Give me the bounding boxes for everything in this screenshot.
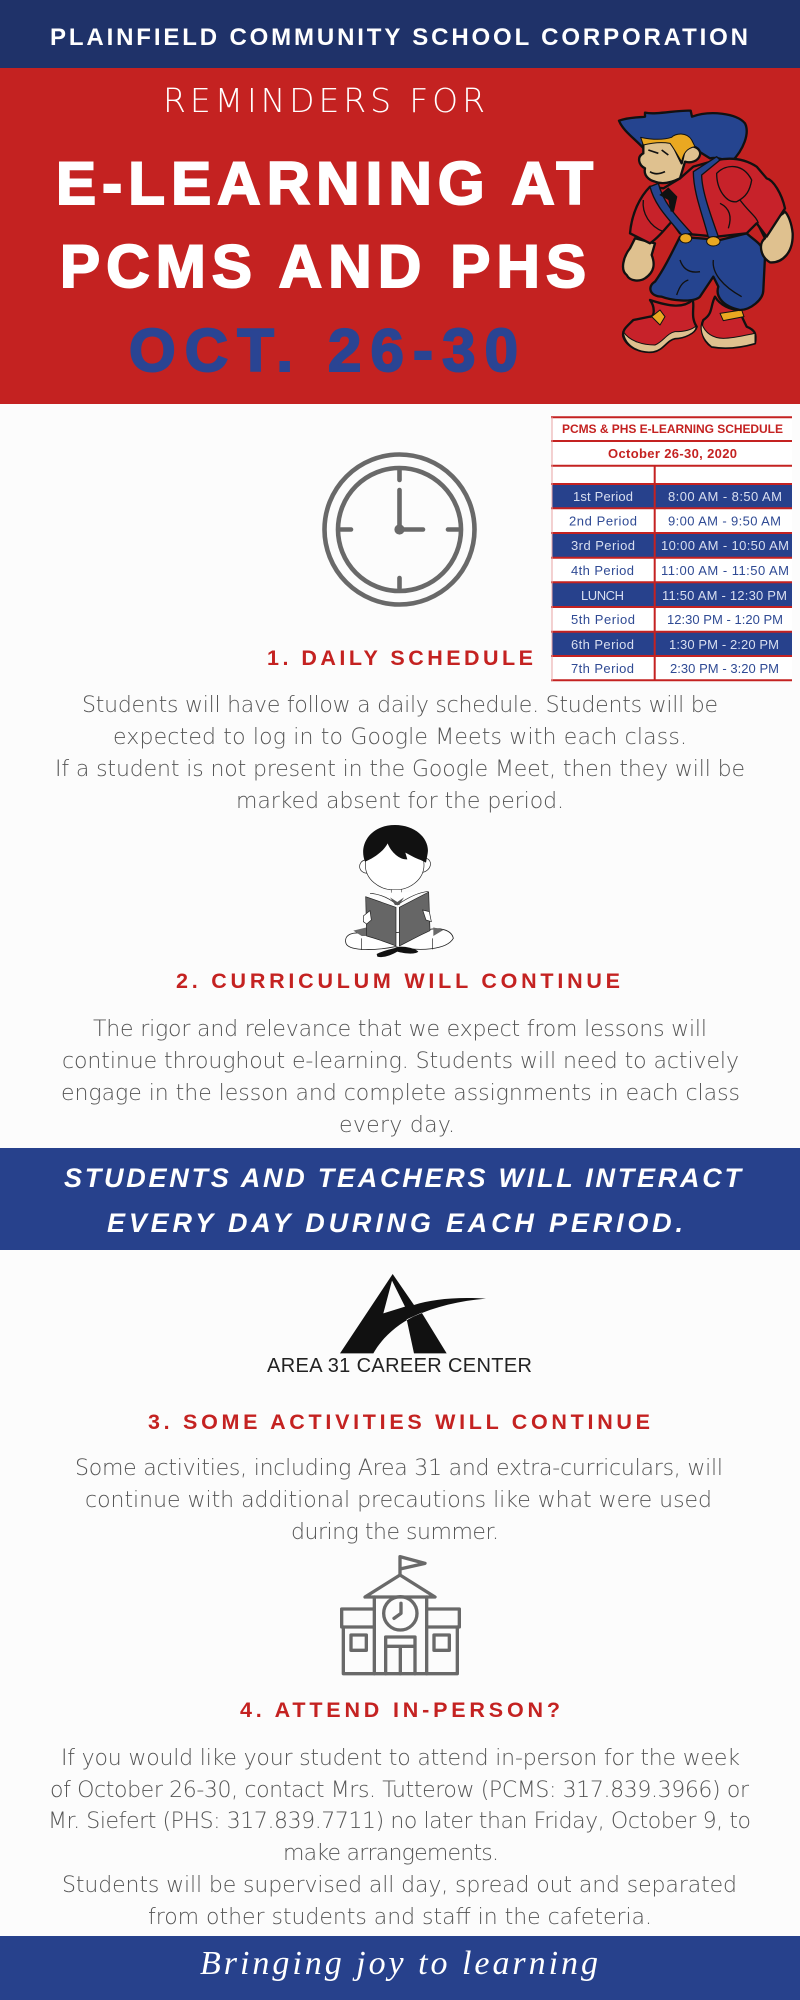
heading 1: 1. DAILY SCHEDULE [267, 646, 533, 670]
title line 1: E-LEARNING AT [56, 150, 593, 217]
section 4: attend in person [48, 1557, 751, 1930]
callout band: STUDENTS AND TEACHERS WILL INTERACT [64, 1163, 744, 1193]
text block 4: from other students and staff in the cafeteria. [148, 1905, 652, 1930]
section 2: curriculum [61, 825, 740, 1138]
text block 4: Students will be supervised all day, spread out and separated [62, 1873, 737, 1898]
table rows: 1st Period [573, 489, 633, 504]
table rows: 6th Period [571, 637, 634, 652]
table date: October 26-30, 2020 [608, 446, 737, 461]
icon: clock [324, 454, 474, 604]
schedule table [551, 417, 792, 681]
text block 2: continue throughout e-learning. Students will need to actively [62, 1049, 739, 1074]
section 3: activities [75, 1274, 723, 1545]
heading 4: 4. ATTEND IN-PERSON? [240, 1698, 560, 1722]
text block 1: If a student is not present in the Google Meet, then they will be [55, 757, 745, 782]
table rows: 5th Period [571, 612, 635, 627]
text block 4: make arrangements. [283, 1841, 499, 1866]
text block 3: Some activities, including Area 31 and extra-curriculars, will [75, 1456, 723, 1481]
table rows: 11:00 AM - 11:50 AM [661, 563, 789, 578]
text block 1: Students will have follow a daily schedule. Students will be [82, 693, 718, 718]
text block 2: every day. [339, 1113, 455, 1138]
subtitle: reminders for: REMINDERS FOR [163, 81, 485, 120]
icon: school building [342, 1557, 459, 1674]
header band: district name: PLAINFIELD COMMUNITY SCHOOL CORPORATION [50, 24, 748, 51]
table rows: 12:30 PM - 1:20 PM [667, 612, 783, 627]
text block 4: If you would like your student to attend in-person for the week [61, 1746, 740, 1771]
heading 3: 3. SOME ACTIVITIES WILL CONTINUE [148, 1410, 650, 1434]
text block 3 [75, 1456, 723, 1545]
icon: Area 31 logo [267, 1274, 532, 1377]
header band: district name [0, 0, 800, 68]
table rows: 2:30 PM - 3:20 PM [670, 661, 779, 676]
title line 2: PCMS AND PHS [60, 233, 586, 300]
text block 1 [55, 693, 745, 814]
hero panel [0, 68, 800, 404]
callout band: EVERY DAY DURING EACH PERIOD. [107, 1208, 683, 1238]
table rows: 4th Period [571, 563, 634, 578]
footer band: tagline [0, 1936, 800, 2000]
table rows: 9:00 AM - 9:50 AM [668, 514, 781, 528]
callout band [0, 1148, 800, 1250]
text block 3: continue with additional precautions like what were used [85, 1488, 712, 1513]
table rows: 2nd Period [569, 514, 637, 528]
table rows: 10:00 AM - 10:50 AM [661, 538, 789, 553]
table rows: 11:50 AM - 12:30 PM [662, 588, 787, 603]
table title: PCMS & PHS E-LEARNING SCHEDULE [562, 422, 783, 436]
text block 2: engage in the lesson and complete assignments in each class [61, 1081, 740, 1106]
text block 2 [61, 1017, 740, 1138]
date heading: OCT. 26-30 [129, 317, 518, 384]
icon: Area 31 logo: AREA 31 CAREER CENTER [267, 1355, 532, 1377]
icon: child reading a book [346, 825, 453, 957]
table rows: 3rd Period [571, 538, 635, 553]
heading 2: 2. CURRICULUM WILL CONTINUE [176, 969, 620, 993]
text block 4 [48, 1746, 751, 1930]
text block 4: of October 26-30, contact Mrs. Tutterow (PCMS: 317.839.3966) or [50, 1778, 750, 1803]
footer band: tagline: Bringing joy to learning [200, 1945, 598, 1982]
section 1: daily schedule [55, 454, 745, 814]
text block 3: during the summer. [291, 1520, 499, 1545]
text block 1: expected to log in to Google Meets with each class. [113, 725, 687, 750]
table rows: LUNCH [581, 588, 624, 603]
text block 1: marked absent for the period. [236, 789, 564, 814]
table rows: 7th Period [571, 661, 634, 676]
icon: mascot [619, 111, 793, 352]
blue row fills [552, 484, 792, 656]
text block 2: The rigor and relevance that we expect from lessons will [93, 1017, 707, 1042]
table rows: 1:30 PM - 2:20 PM [669, 637, 779, 652]
table rows [569, 489, 789, 676]
text block 4: Mr. Siefert (PHS: 317.839.7711) no later than Friday, October 9, to [48, 1809, 751, 1834]
table rows: 8:00 AM - 8:50 AM [668, 489, 782, 504]
